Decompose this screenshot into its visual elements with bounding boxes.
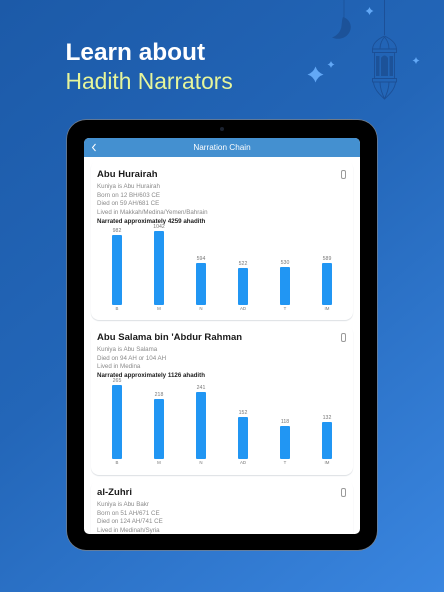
panel: Abu Salama bbox=[91, 325, 353, 475]
narrator details: Narrated approximately 1126 ahadith bbox=[97, 372, 205, 379]
narrator details: Narrated approximately 4259 ahadith bbox=[97, 218, 205, 225]
icon: crescent moon bbox=[332, 0, 351, 39]
icon: link bbox=[341, 170, 346, 178]
bar chart: M bbox=[157, 306, 161, 311]
bar chart: AD bbox=[240, 306, 246, 311]
bar chart: 982 bbox=[113, 228, 121, 234]
bar chart: B bbox=[116, 460, 118, 465]
heading: Hadith Narrators: Hadith Narrators bbox=[66, 68, 233, 94]
narrator details: Lived in Medina bbox=[97, 363, 140, 370]
narrator details: Died on 59 AH/681 CE bbox=[97, 200, 159, 207]
decorative icons bbox=[308, 0, 420, 100]
bar chart: T bbox=[284, 460, 286, 465]
bar chart: 118 bbox=[281, 419, 289, 425]
narrator details bbox=[97, 183, 208, 225]
narrator details: Born on 12 BH/603 CE bbox=[97, 192, 160, 199]
icon: lantern bbox=[372, 0, 396, 99]
camera bbox=[220, 127, 224, 131]
bar chart: 522 bbox=[239, 261, 247, 267]
tablet side button bbox=[327, 118, 353, 120]
bar chart: 152 bbox=[239, 410, 247, 416]
heading: Learn about: Learn about bbox=[66, 39, 205, 66]
bar chart: 530 bbox=[281, 260, 289, 266]
bar chart: 241 bbox=[197, 385, 205, 391]
bar chart: 132 bbox=[323, 415, 331, 421]
app bar bbox=[84, 138, 360, 157]
tablet bbox=[67, 120, 377, 550]
bar chart: N bbox=[199, 306, 203, 311]
bar chart: 1042 bbox=[153, 224, 165, 230]
bar chart: M bbox=[157, 460, 161, 465]
panel: Abu Salama: 265 bbox=[113, 378, 121, 384]
narrator name: al-Zuhri bbox=[97, 487, 132, 498]
bar chart: B bbox=[116, 306, 118, 311]
bar chart: 594 bbox=[197, 256, 205, 262]
narrator name: Abu Salama bin 'Abdur Rahman bbox=[97, 332, 242, 343]
icon: link bbox=[341, 488, 346, 497]
bar chart: AD bbox=[240, 460, 246, 465]
screen bbox=[84, 138, 360, 534]
icon: star small bbox=[328, 61, 334, 68]
panel: Abu Hurairah bbox=[91, 160, 353, 320]
bar chart: T bbox=[284, 306, 286, 311]
bar chart: 589 bbox=[323, 256, 331, 262]
bar chart bbox=[112, 224, 332, 311]
icon: star large bbox=[308, 66, 324, 82]
screen title: Narration Chain bbox=[193, 143, 251, 152]
bar chart bbox=[112, 378, 332, 465]
bar chart: 218 bbox=[155, 392, 163, 398]
narrator details: Lived in Makkah/Medina/Yemen/Bahrain bbox=[97, 209, 208, 216]
panel: al-Zuhri bbox=[91, 480, 353, 550]
bar chart: IM bbox=[325, 460, 329, 465]
title bbox=[66, 39, 233, 94]
narrator details: Kuniya is Abu Salama bbox=[97, 346, 157, 353]
narrator name: Abu Hurairah bbox=[97, 168, 158, 180]
narrator details bbox=[97, 501, 163, 534]
narrator details: Born on 51 AH/671 CE bbox=[97, 510, 160, 517]
bar chart: N bbox=[199, 460, 203, 465]
back arrow bbox=[92, 144, 96, 152]
narrator details bbox=[97, 346, 205, 379]
icon: star top bbox=[366, 7, 374, 15]
icon: star right bbox=[412, 57, 420, 64]
bar chart: IM bbox=[325, 306, 329, 311]
narrator details: Kuniya is Abu Hurairah bbox=[97, 183, 160, 190]
narrator details: Died on 94 AH or 104 AH bbox=[97, 355, 166, 362]
icon: link bbox=[341, 333, 346, 342]
narrator details: Kuniya is Abu Bakr bbox=[97, 501, 149, 508]
narrator details: Lived in Medinah/Syria bbox=[97, 527, 160, 534]
narrator details: Died on 124 AH/741 CE bbox=[97, 518, 163, 525]
